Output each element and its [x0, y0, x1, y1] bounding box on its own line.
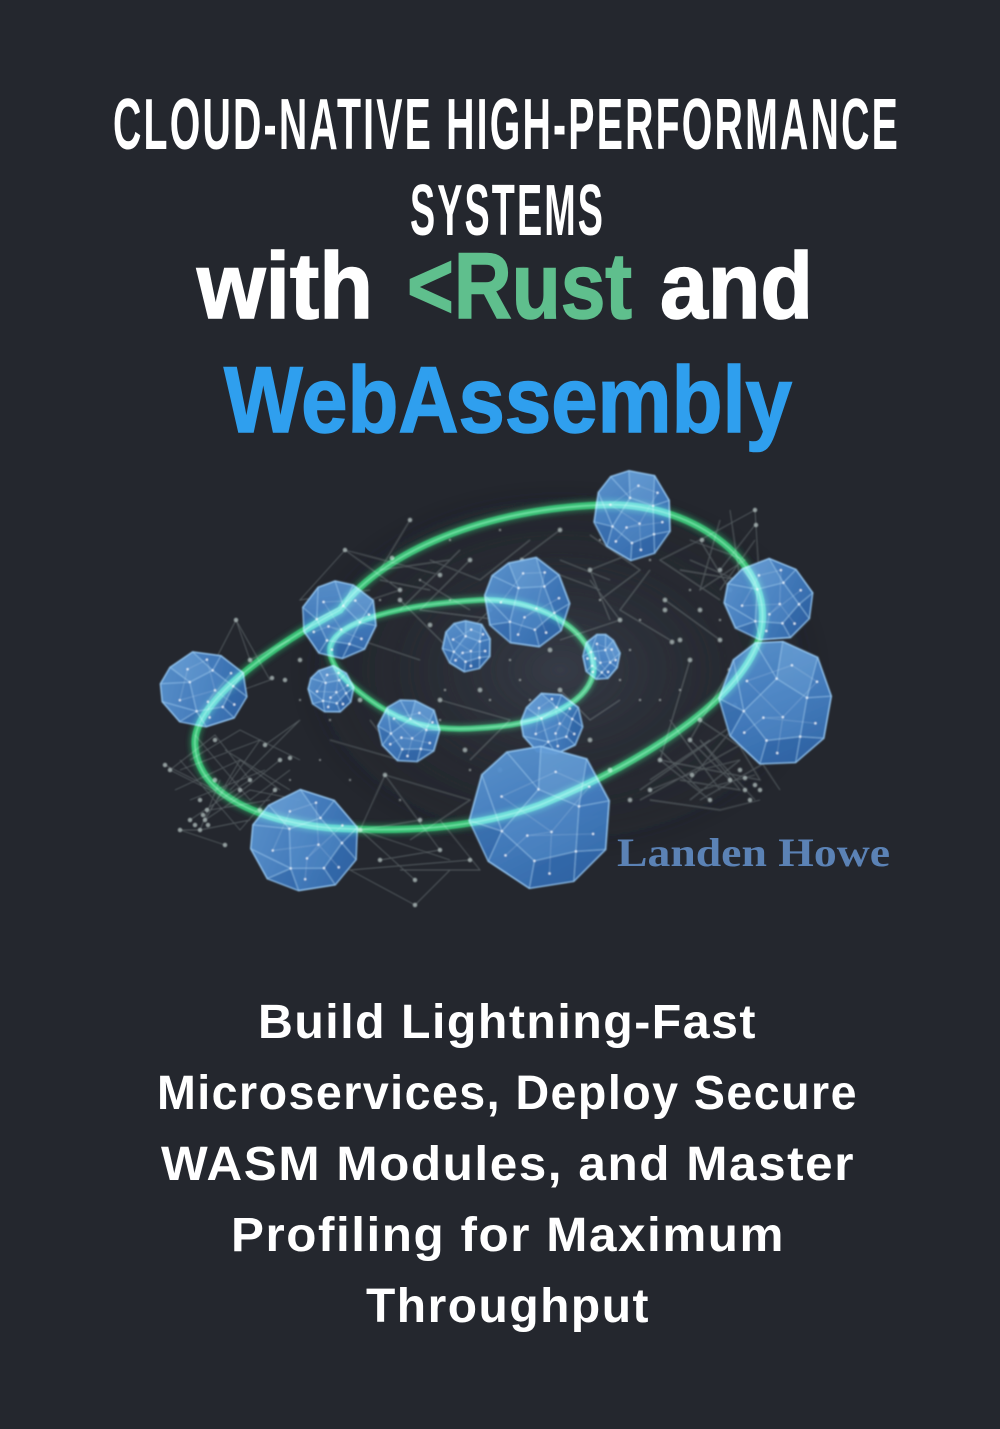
heading: WebAssembly: WebAssembly [224, 347, 792, 452]
green outer ring [195, 505, 763, 830]
subtitle: Throughput [366, 1280, 650, 1333]
subtitle: Microservices, Deploy Secure [157, 1067, 858, 1120]
subtitle [157, 996, 858, 1333]
subtitle: Profiling for Maximum [231, 1209, 785, 1262]
polyhedron: top [588, 463, 679, 568]
title: cloud-native high-performance systems [113, 85, 900, 251]
subtitle: WASM Modules, and Master [161, 1138, 855, 1191]
polyhedron: inner ring right [576, 627, 626, 688]
heading: with Rust and [196, 233, 813, 338]
network dots [165, 510, 760, 905]
author name: Landen Howe [617, 830, 890, 875]
polyhedron: inner ring bottom right [511, 681, 595, 768]
background haze [290, 480, 830, 860]
heading: with Rust and: <Rust [407, 233, 632, 338]
polyhedron: bottom left [236, 776, 377, 909]
green inner ring [330, 600, 594, 729]
illustration: network of polyhedra and green rings [146, 463, 851, 909]
polyhedron: centre large [481, 553, 575, 654]
network mesh lines [165, 510, 780, 905]
polyhedron: lower right [702, 622, 851, 786]
subtitle: Build Lightning-Fast [258, 996, 757, 1049]
polyhedron: bottom large [453, 730, 630, 907]
title: cloud-native high-performance systems: SYSTEMS [410, 171, 605, 251]
polyhedron: inner ring bottom left [367, 689, 451, 774]
polyhedron: left middle [286, 568, 392, 674]
polyhedron: centre small [438, 616, 497, 677]
polyhedron: far left [146, 638, 264, 743]
heading: with Rust and: with [196, 233, 373, 338]
heading: with Rust and: and [660, 233, 813, 338]
polyhedron: inner ring left [304, 662, 359, 719]
polyhedron: upper right [714, 549, 826, 653]
